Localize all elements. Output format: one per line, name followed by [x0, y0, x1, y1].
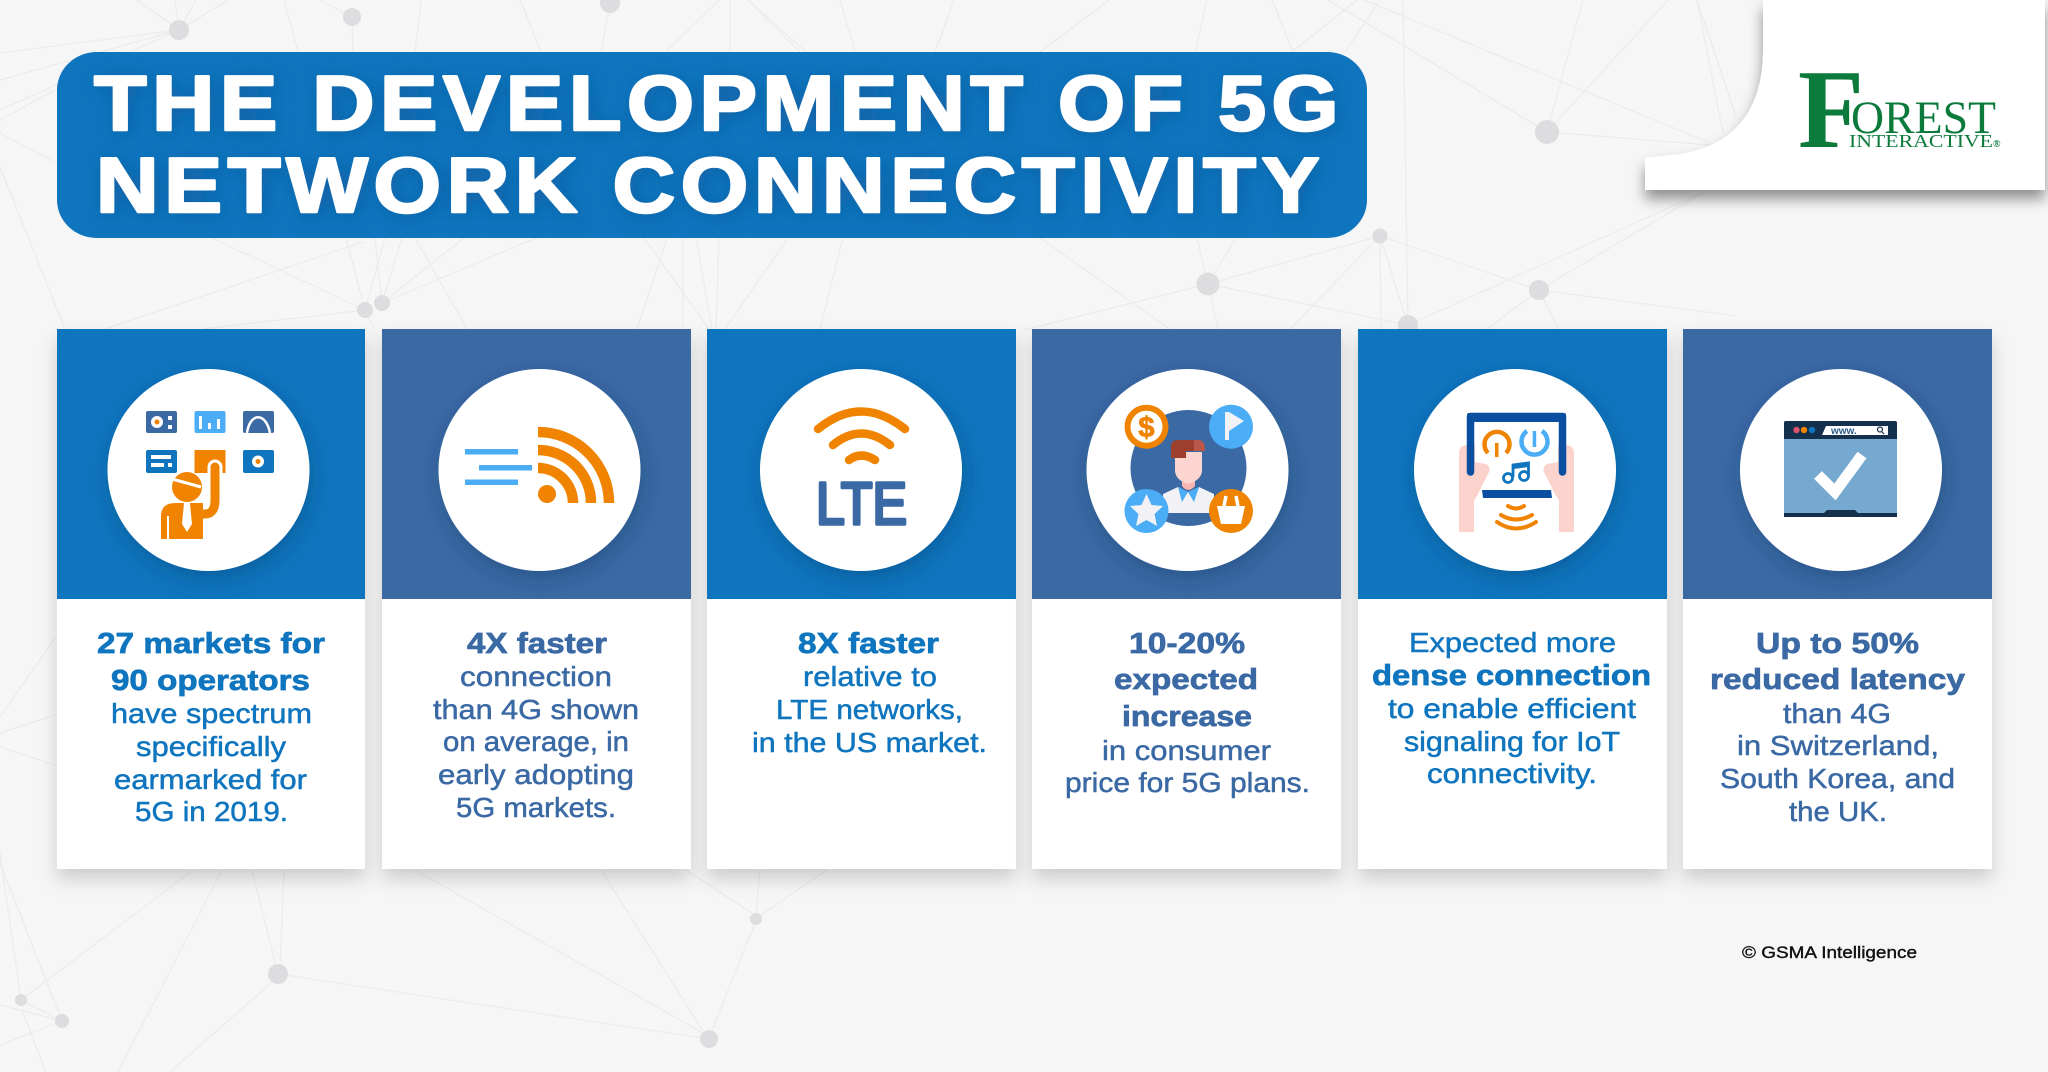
text: card 6: the UK. [1789, 796, 1887, 827]
text: card 4 [1065, 628, 1310, 798]
text: card 4: expected [1114, 664, 1258, 696]
logo: Forest Interactive: F [1798, 48, 1864, 172]
logo: Forest Interactive: OREST [1851, 92, 1996, 144]
text: card 5: connectivity. [1427, 758, 1597, 789]
source credit: © GSMA Intelligence [1742, 943, 1917, 962]
text: card 4: in consumer [1102, 735, 1271, 766]
text: card 1: have spectrum [111, 698, 312, 729]
text: card 1: earmarked for [114, 764, 307, 795]
text: card 2: connection [460, 661, 612, 692]
text: card 5: to enable efficient [1388, 693, 1636, 724]
text: card 6: in Switzerland, [1737, 730, 1939, 761]
logo: Forest Interactive: INTERACTIVE [1849, 131, 1993, 151]
text: card 5 [1372, 627, 1651, 789]
text: card 1: specifically [136, 731, 286, 762]
text: card 4: 10-20% [1129, 628, 1245, 660]
text: card 4: increase [1122, 701, 1252, 733]
panel: card 6 latency [1683, 329, 1992, 869]
text: card 6 [1710, 628, 1965, 827]
text: card 3: in the US market. [752, 727, 987, 758]
text: card 4: price for 5G plans. [1065, 767, 1310, 798]
text: card 2: early adopting [438, 759, 634, 790]
text: card 2 [433, 628, 639, 823]
text: card 3: 8X faster [798, 628, 939, 660]
logo: Forest Interactive: ® [1993, 139, 2001, 150]
title text [94, 59, 1344, 229]
icon: consumer with coins [1124, 405, 1253, 533]
text: card 3: LTE networks, [776, 694, 963, 725]
text: card 5: Expected more [1409, 627, 1616, 658]
text: card 2: on average, in [443, 726, 629, 757]
panel: card 1 markets [57, 329, 365, 869]
icon: consumer with coins: $ [1138, 412, 1155, 444]
text: card 1: 27 markets for [97, 628, 325, 660]
text: card 6: reduced latency [1710, 664, 1965, 696]
text: card 3: relative to [803, 661, 937, 692]
text: card 2: 4X faster [467, 628, 607, 660]
text: card 5: dense connection [1372, 660, 1651, 692]
text: card 1: 90 operators [111, 665, 310, 697]
text: card 1: 5G in 2019. [135, 796, 288, 827]
panel: card 3 LTE [707, 329, 1016, 869]
title text: THE DEVELOPMENT OF 5G [94, 59, 1344, 147]
panel: card 2 speed [382, 329, 691, 869]
text: card 6: Up to 50% [1756, 628, 1919, 660]
icon: LTE wifi [816, 412, 907, 537]
text: card 1 [97, 628, 325, 827]
icon: browser check [1784, 421, 1897, 517]
text: card 3 [752, 628, 987, 758]
logo: Forest Interactive [1798, 48, 2001, 172]
title text: NETWORK CONNECTIVITY [96, 141, 1325, 229]
icon: fast signal [465, 432, 609, 503]
panel: card 4 consumer [1032, 329, 1341, 869]
title banner [57, 52, 1367, 238]
logo panel [1645, 0, 2045, 190]
icon: browser check: www. [1830, 426, 1857, 437]
text: card 6: South Korea, and [1720, 763, 1955, 794]
icon: LTE wifi: LTE [816, 471, 907, 537]
panel: card 5 IoT [1358, 329, 1667, 869]
text: card 2: than 4G shown [433, 694, 639, 725]
text: card 6: than 4G [1783, 698, 1891, 729]
text: card 5: signaling for IoT [1404, 726, 1620, 757]
icon: tablet in hands [1459, 413, 1574, 532]
text: card 2: 5G markets. [456, 792, 616, 823]
icon: person with dashboard tiles [146, 411, 274, 539]
